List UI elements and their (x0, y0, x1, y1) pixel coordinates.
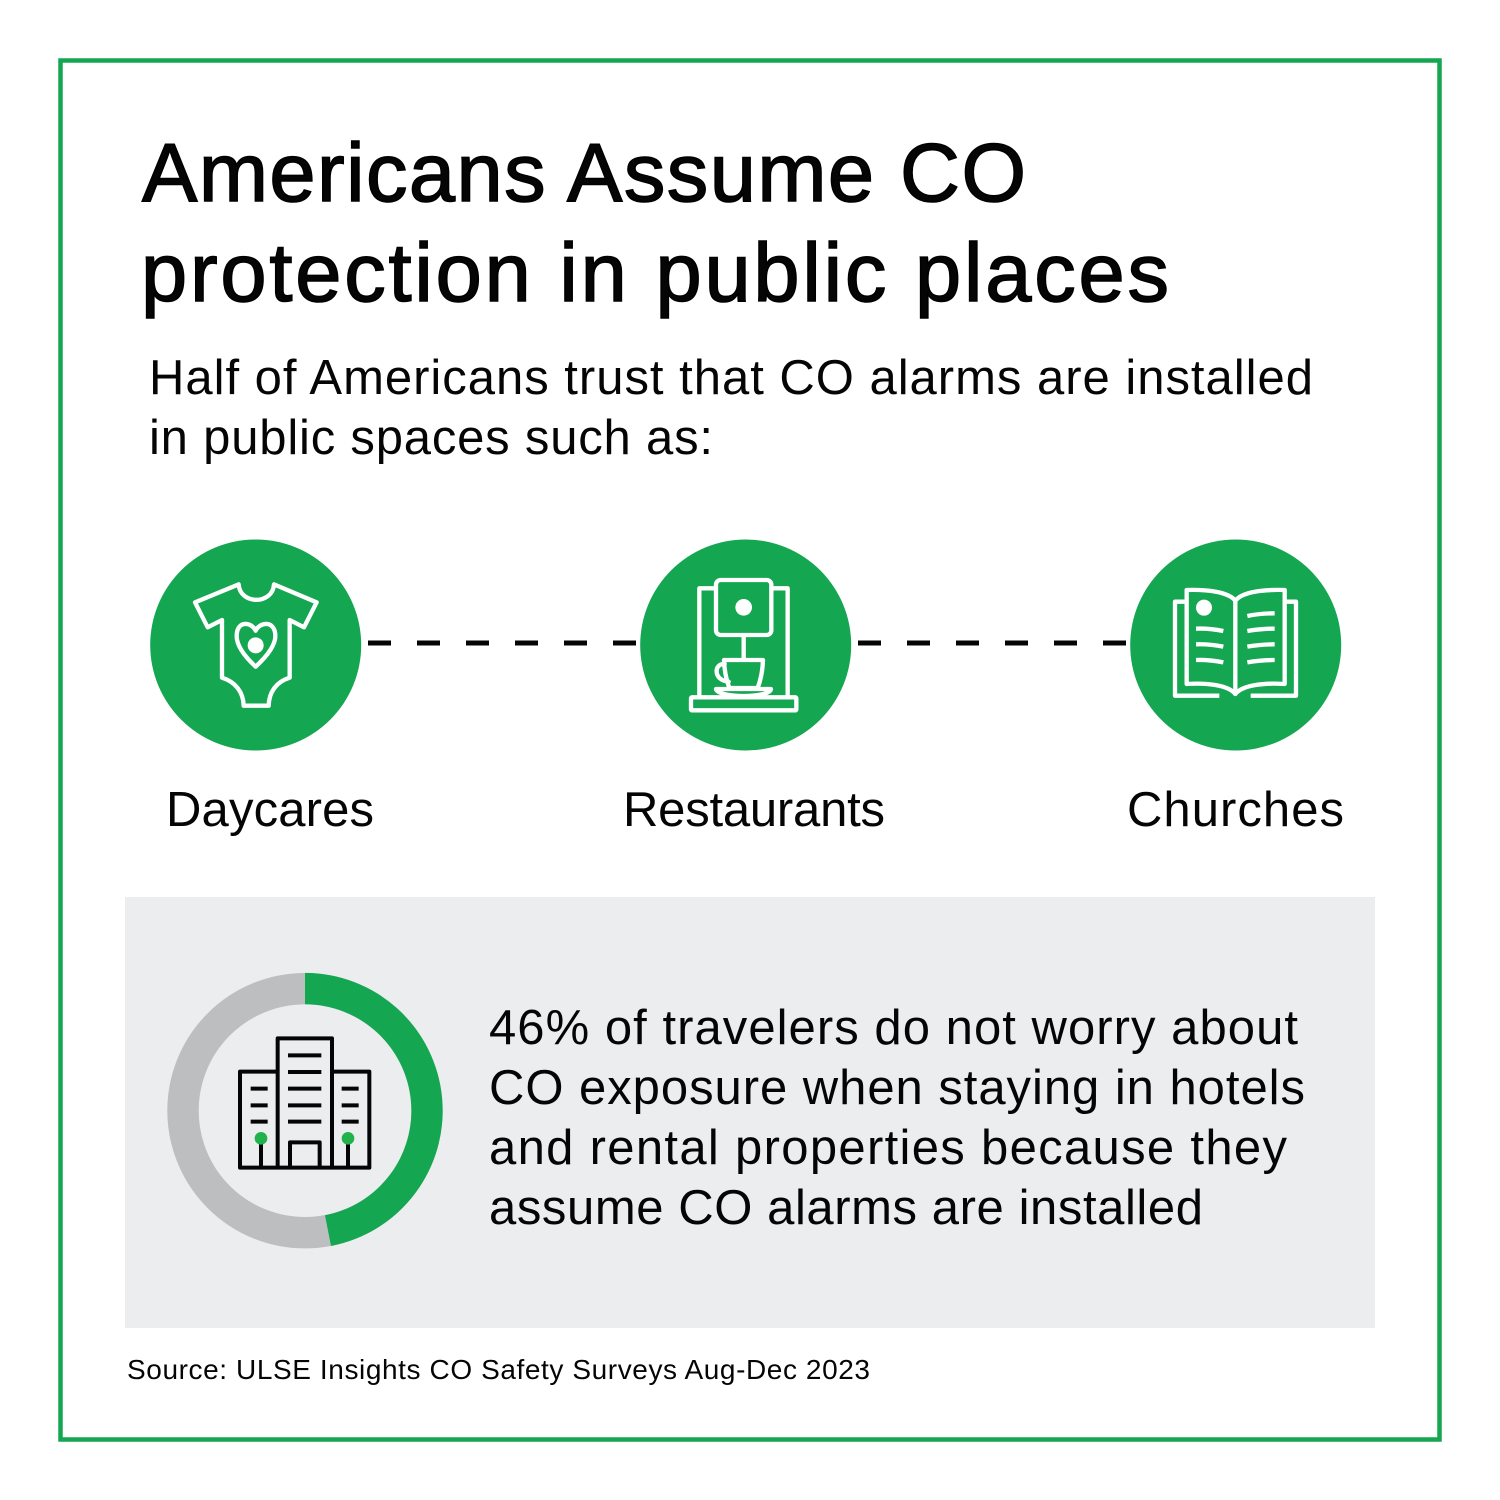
label: Restaurants: Restaurants (623, 783, 885, 837)
title: protection in public places (141, 226, 1169, 319)
statistic text: CO exposure when staying in hotels (489, 1061, 1305, 1115)
intro text: in public spaces such as: (149, 411, 713, 465)
dashed connector: restaurants to churches (858, 640, 1130, 646)
donut chart: 46 percent (183, 973, 443, 1246)
intro text (149, 351, 1313, 465)
title: Americans Assume CO (142, 126, 1026, 219)
label: Churches: Churches (1127, 783, 1344, 837)
statistic text: assume CO alarms are installed (489, 1181, 1203, 1235)
statistic text (489, 1001, 1305, 1235)
source note: Source: ULSE Insights CO Safety Surveys Aug-Dec 2023 (127, 1354, 870, 1385)
panel: travelers statistic (125, 897, 1375, 1328)
title (141, 126, 1169, 319)
label: Daycares: Daycares (166, 783, 374, 837)
intro text: Half of Americans trust that CO alarms are installed (149, 351, 1313, 405)
icon: open book (1130, 540, 1341, 750)
icon: hotel buildings (240, 1038, 369, 1168)
dashed connector: daycares to restaurants (368, 640, 640, 646)
icon: onesie (150, 540, 361, 750)
statistic text: and rental properties because they (489, 1121, 1288, 1175)
statistic text: 46% of travelers do not worry about (489, 1001, 1298, 1055)
icon: coffee machine (640, 540, 851, 750)
